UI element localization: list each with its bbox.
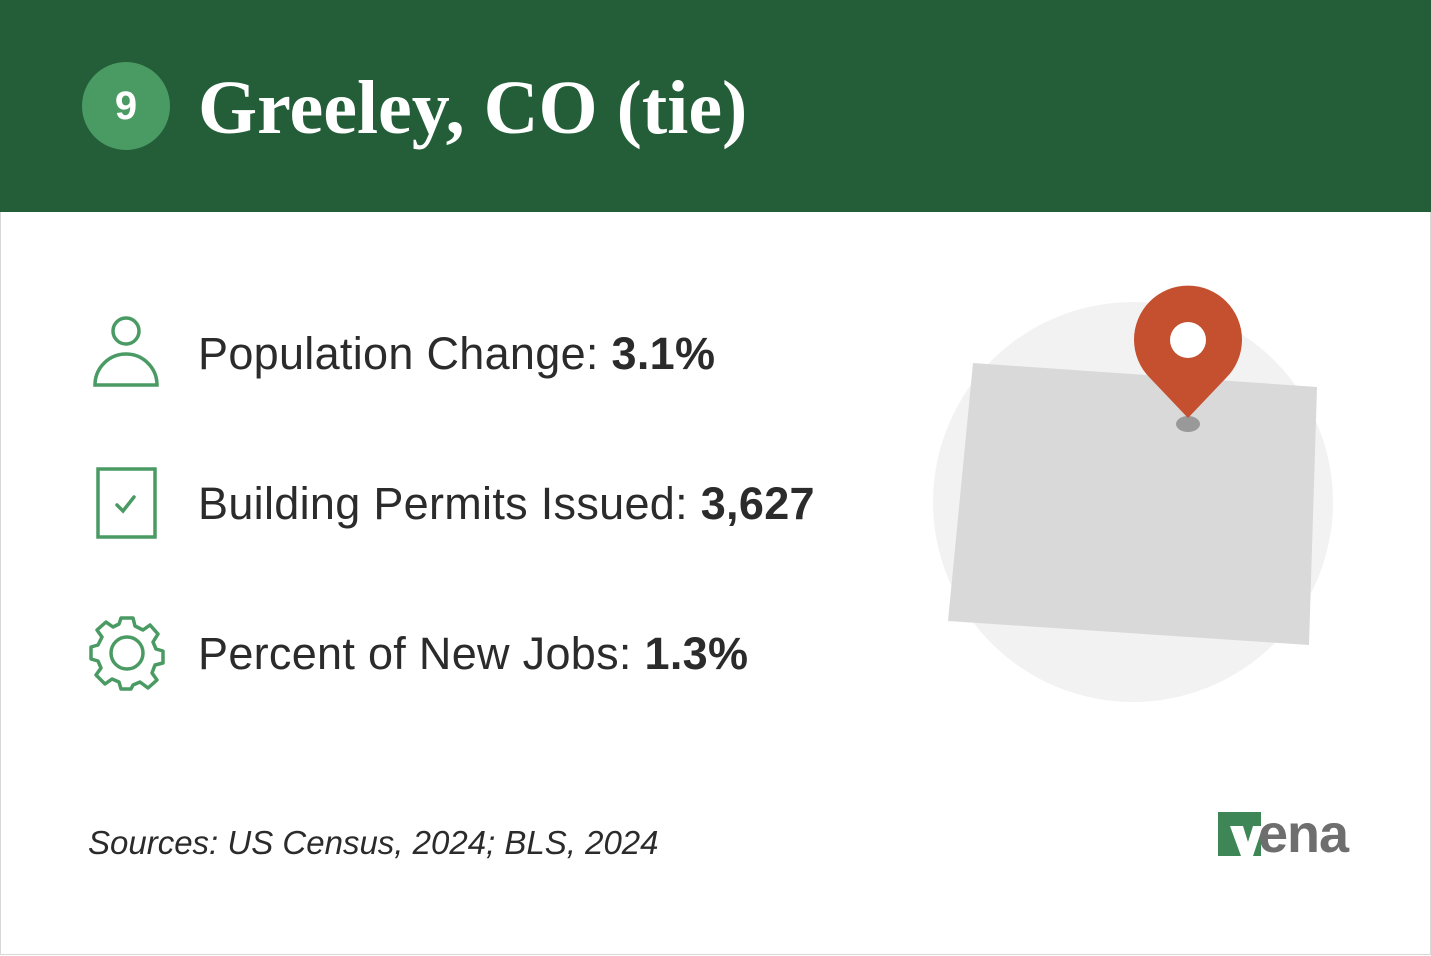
map: Colorado with pin bbox=[933, 286, 1333, 702]
sources: Sources: US Census, 2024; BLS, 2024 bbox=[88, 824, 659, 861]
icon: permit bbox=[96, 467, 157, 539]
header band bbox=[0, 0, 1431, 212]
title: Greeley, CO (tie) bbox=[198, 66, 747, 150]
stat: permits: Building Permits Issued: 3,627 bbox=[198, 478, 815, 529]
rank badge bbox=[82, 62, 170, 150]
stat: population: Population Change: 3.1% bbox=[198, 328, 715, 379]
icon: person bbox=[93, 316, 159, 387]
logo: vena bbox=[1218, 804, 1350, 864]
stat: jobs: Percent of New Jobs: 1.3% bbox=[198, 628, 748, 679]
card border bbox=[0, 212, 1431, 955]
rank badge: 9 bbox=[115, 84, 137, 128]
pin bbox=[1134, 286, 1242, 432]
logo: vena: ena bbox=[1258, 804, 1348, 864]
icon: gear bbox=[89, 616, 165, 691]
